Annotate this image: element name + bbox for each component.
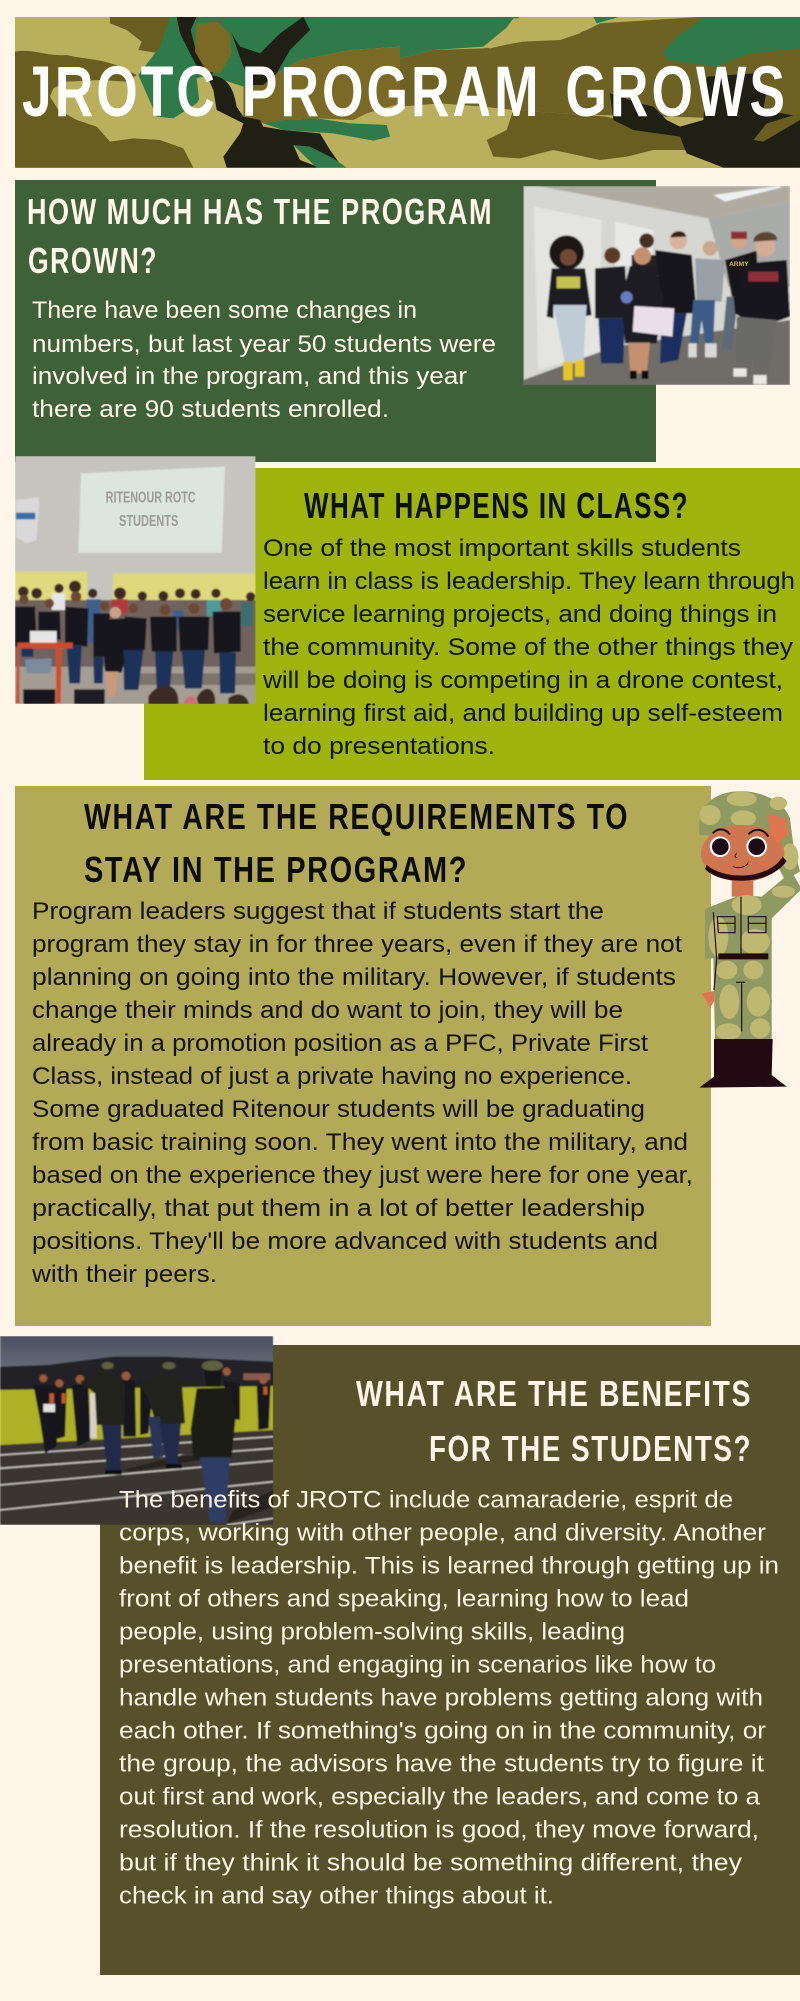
body text: program requirements: positions. They'll be more advanced with students and xyxy=(32,1228,658,1255)
photo: cadets saluting on the track xyxy=(0,1336,273,1525)
body text: program requirements: Program leaders suggest that if students start the xyxy=(32,898,604,925)
body text: enrollment numbers: There have been some changes in xyxy=(32,297,417,324)
body text: program requirements: planning on going into the military. However, if students xyxy=(32,964,676,991)
body text: class activities: the community. Some of the other things they xyxy=(263,634,793,661)
body text: class activities xyxy=(262,535,795,760)
panel: how much has the program grown xyxy=(15,180,656,462)
body text: class activities: service learning projects, and doing things in xyxy=(263,601,777,628)
body text: benefits of JROTC: out first and work, especially the leaders, and come to a xyxy=(119,1784,761,1810)
body text: program requirements: based on the experience they just were here for one year, xyxy=(32,1162,693,1189)
body text: enrollment numbers xyxy=(32,297,496,423)
body text: program requirements: program they stay in for three years, even if they are not xyxy=(32,931,682,958)
projected slide text xyxy=(106,492,196,526)
body text: benefits of JROTC: front of others and speaking, learning how to lead xyxy=(119,1586,689,1612)
body text: program requirements: with their peers. xyxy=(31,1261,217,1288)
body text: program requirements xyxy=(31,898,693,1288)
body text: benefits of JROTC xyxy=(119,1486,779,1910)
body text: class activities: will be doing is competing in a drone contest, xyxy=(262,667,783,694)
header banner: camouflage with title xyxy=(15,17,800,168)
body text: benefits of JROTC: people, using problem-solving skills, leading xyxy=(119,1618,625,1646)
body text: benefits of JROTC: benefit is leadership. This is learned through getting up in xyxy=(119,1552,779,1580)
body text: class activities: One of the most important skills students xyxy=(263,535,741,562)
camouflage background xyxy=(15,17,800,168)
body text: enrollment numbers: involved in the program, and this year xyxy=(32,363,467,390)
heading: requirements to stay in the program xyxy=(84,796,629,890)
panel: what happens in class xyxy=(144,468,800,780)
body text: benefits of JROTC: check in and say other things about it. xyxy=(119,1882,554,1910)
heading: how much has the program grown: HOW MUCH HAS THE PROGRAM xyxy=(27,191,493,232)
heading: benefits for the students xyxy=(356,1373,752,1469)
panel: requirements to stay in the program xyxy=(15,786,711,1326)
body text: benefits of JROTC: the group, the advisors have the students try to figure it xyxy=(119,1750,764,1778)
body text: program requirements: change their minds and do want to join, they will be xyxy=(32,997,623,1024)
body text: class activities: to do presentations. xyxy=(263,733,495,760)
photo: cadets and instructor in classroom: ARMY xyxy=(729,261,749,268)
body text: program requirements: from basic training soon. They went into the military, and xyxy=(32,1129,688,1156)
body text: benefits of JROTC: but if they think it should be something different, they xyxy=(119,1850,742,1876)
body text: benefits of JROTC: corps, working with other people, and diversity. Another xyxy=(119,1520,766,1546)
body text: enrollment numbers: there are 90 students enrolled. xyxy=(32,396,389,423)
heading: requirements to stay in the program: STAY IN THE PROGRAM? xyxy=(84,849,468,890)
photo: Ritenour ROTC students on risers xyxy=(15,456,256,704)
body text: enrollment numbers: numbers, but last year 50 students were xyxy=(32,331,496,358)
body text: benefits of JROTC: each other. If something's going on in the community, or xyxy=(119,1718,766,1744)
body text: benefits of JROTC: The benefits of JROTC include camaraderie, esprit de xyxy=(119,1486,733,1514)
panel: benefits for the students xyxy=(100,1345,800,1975)
body text: benefits of JROTC: handle when students have problems getting along with xyxy=(119,1684,763,1712)
icon: saluting cartoon soldier xyxy=(699,791,800,1088)
heading: how much has the program grown: GROWN? xyxy=(28,240,158,281)
heading: how much has the program grown xyxy=(27,191,493,281)
body text: benefits of JROTC: presentations, and engaging in scenarios like how to xyxy=(119,1652,716,1678)
body text: program requirements: practically, that put them in a lot of better leadership xyxy=(32,1195,645,1222)
projected slide text: STUDENTS xyxy=(119,513,179,530)
heading: requirements to stay in the program: WHAT ARE THE REQUIREMENTS TO xyxy=(84,796,629,837)
projected slide text: RITENOUR ROTC xyxy=(106,489,196,506)
photo: cadets and instructor in classroom xyxy=(523,186,790,385)
body text: program requirements: Class, instead of just a private having no experience. xyxy=(32,1063,632,1090)
body text: program requirements: Some graduated Ritenour students will be graduating xyxy=(32,1096,645,1123)
body text: class activities: learning first aid, and building up self-esteem xyxy=(263,700,783,727)
body text: program requirements: already in a promotion position as a PFC, Private First xyxy=(32,1030,648,1057)
body text: benefits of JROTC: resolution. If the resolution is good, they move forward, xyxy=(119,1816,759,1844)
body text: class activities: learn in class is leadership. They learn through xyxy=(263,568,795,595)
